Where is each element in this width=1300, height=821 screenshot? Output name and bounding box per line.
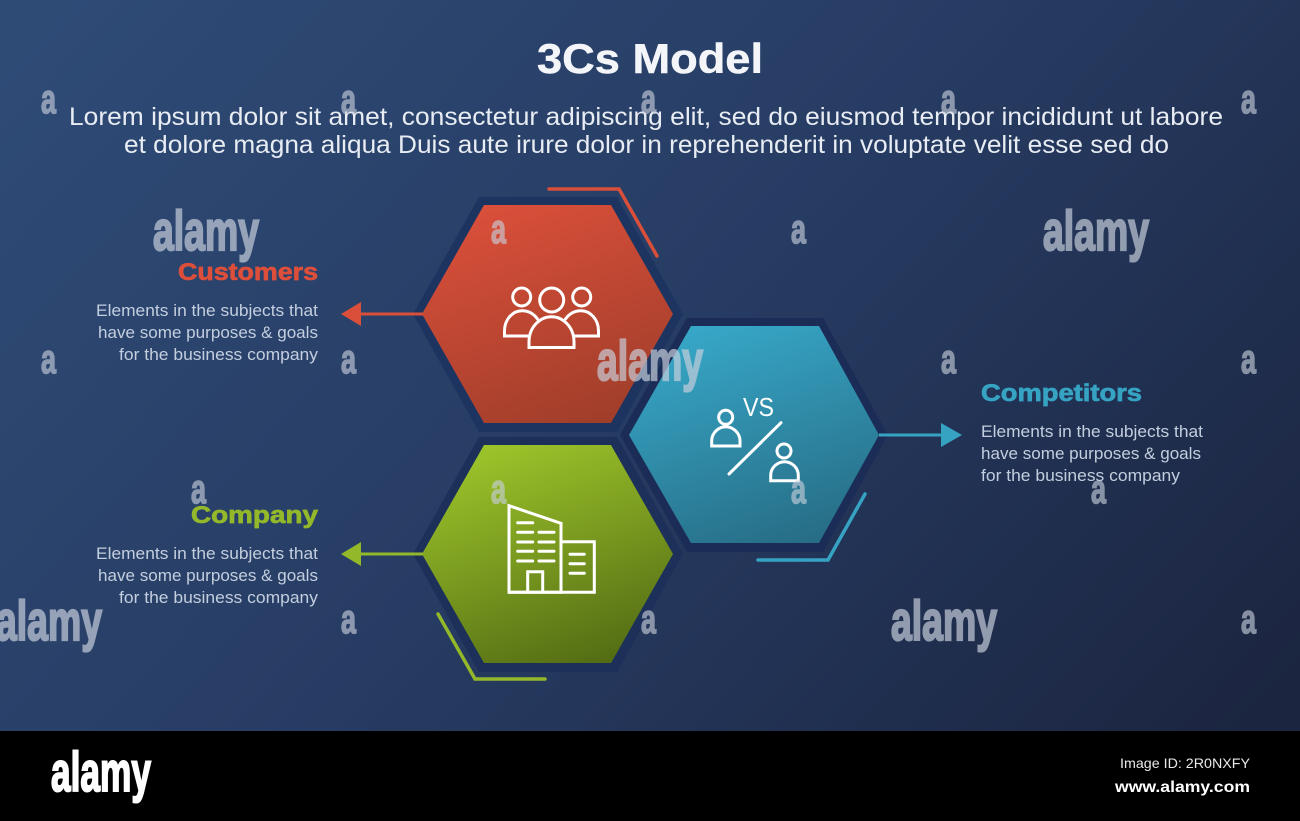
text block: competitors: Competitors <box>981 380 1142 407</box>
watermarks: alamy <box>0 589 102 652</box>
image id: Image ID: 2R0NXFY <box>1120 755 1251 771</box>
arrow: company <box>341 542 423 566</box>
intro text <box>69 103 1223 159</box>
watermarks: a <box>491 206 507 252</box>
title: 3Cs Model <box>537 35 763 82</box>
accent line: competitors <box>758 494 865 560</box>
hexagon: competitors <box>620 318 888 560</box>
text block: competitors: Elements in the subjects that <box>981 422 1203 441</box>
watermarks: a <box>791 466 807 512</box>
text block: company <box>96 502 319 607</box>
website: www.alamy.com <box>1114 779 1250 796</box>
watermarks: a <box>341 76 357 122</box>
arrow: competitors <box>879 423 962 447</box>
arrow: customers <box>341 302 423 326</box>
text block: company: have some purposes & goals <box>98 566 318 585</box>
text block: customers: for the business company <box>119 345 319 364</box>
watermarks: alamy <box>597 329 703 392</box>
text block: customers: Elements in the subjects that <box>96 301 318 320</box>
watermarks: a <box>791 206 807 252</box>
icon: office building <box>509 506 594 592</box>
watermarks: a <box>41 76 57 122</box>
footer bar <box>0 731 1300 821</box>
text block: company: for the business company <box>119 588 319 607</box>
intro text: et dolore magna aliqua Duis aute irure dolor in reprehenderit in voluptate velit esse sed do <box>124 131 1169 159</box>
watermarks: a <box>1241 76 1257 122</box>
hexagon: customers <box>413 189 683 432</box>
footer logo: alamy <box>51 740 151 803</box>
watermarks: alamy <box>1043 199 1149 262</box>
intro text: Lorem ipsum dolor sit amet, consectetur adipiscing elit, sed do eiusmod tempor incididunt ut labore <box>69 103 1223 131</box>
watermarks: alamy <box>153 199 259 262</box>
text block: competitors: for the business company <box>981 466 1181 485</box>
icon: people group <box>504 288 598 348</box>
watermarks: a <box>641 76 657 122</box>
watermarks: alamy <box>891 589 997 652</box>
watermarks: a <box>341 596 357 642</box>
watermarks: a <box>941 76 957 122</box>
text block: company: Elements in the subjects that <box>96 544 318 563</box>
watermarks: a <box>1091 466 1107 512</box>
watermarks <box>0 76 1257 652</box>
text block: competitors <box>981 380 1203 485</box>
watermarks: a <box>641 596 657 642</box>
text block: customers: have some purposes & goals <box>98 323 318 342</box>
icon: person versus person: VS <box>743 392 774 422</box>
icon: person versus person <box>712 392 798 481</box>
watermarks: a <box>941 336 957 382</box>
watermarks: a <box>1241 336 1257 382</box>
watermarks: a <box>41 336 57 382</box>
watermarks: a <box>1241 596 1257 642</box>
hexagon: company <box>413 437 683 679</box>
watermarks: a <box>341 336 357 382</box>
watermarks: a <box>191 466 207 512</box>
text block: customers: Customers <box>178 259 318 286</box>
text block: customers <box>96 259 319 364</box>
accent line: company <box>438 614 545 679</box>
accent line: customers <box>549 189 657 256</box>
text block: competitors: have some purposes & goals <box>981 444 1201 463</box>
watermarks: a <box>491 466 507 512</box>
text block: company: Company <box>191 502 319 529</box>
